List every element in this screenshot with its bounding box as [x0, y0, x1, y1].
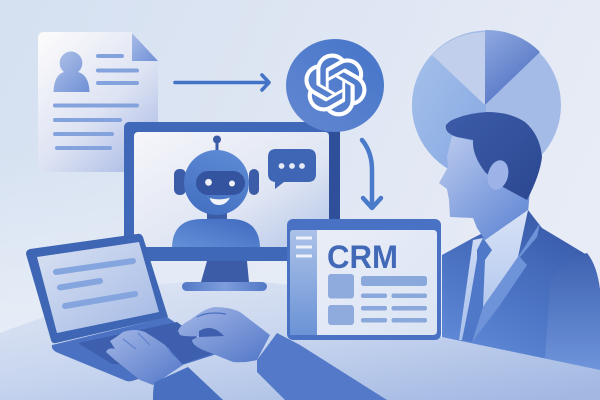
sidebar	[290, 230, 317, 335]
right lapel	[472, 223, 540, 342]
robot body	[172, 219, 260, 247]
antenna	[216, 142, 218, 152]
robot neck	[207, 213, 227, 220]
resume document	[38, 32, 158, 172]
monitor base	[182, 282, 267, 291]
page fold	[132, 33, 158, 61]
businessman	[439, 112, 600, 372]
table rows	[361, 276, 427, 322]
robot ears	[174, 169, 186, 195]
shirt collar	[459, 210, 528, 340]
laptop lid	[26, 234, 168, 343]
speech bubble	[268, 149, 316, 189]
left sleeve	[153, 367, 223, 400]
suit sleeve	[545, 253, 600, 372]
CRM tablet	[287, 219, 441, 340]
sidebar menu lines	[296, 236, 312, 258]
right sleeve	[257, 333, 387, 400]
suit	[442, 210, 600, 372]
laptop screen	[37, 242, 159, 333]
eyes	[205, 179, 212, 186]
laptop base	[52, 317, 220, 381]
left hand	[106, 330, 183, 385]
arrow: resume to AI	[175, 75, 269, 90]
curved arrow: AI to CRM	[362, 140, 381, 208]
content cards	[328, 274, 354, 325]
ear	[484, 158, 512, 192]
desk	[0, 281, 600, 400]
monitor frame	[124, 122, 340, 261]
necktie	[462, 238, 492, 342]
pie chart	[412, 30, 561, 179]
document sheet	[38, 32, 158, 172]
right hand	[178, 307, 270, 362]
CRM heading: CRM	[327, 239, 398, 275]
text lines	[55, 56, 137, 148]
robot head	[184, 150, 249, 215]
keyboard	[78, 322, 218, 364]
monitor screen	[134, 132, 329, 247]
screen lines	[56, 261, 135, 306]
tablet frame	[287, 219, 441, 340]
visor	[196, 171, 245, 195]
robot	[172, 136, 260, 247]
desktop monitor	[124, 122, 340, 291]
monitor stand	[201, 261, 249, 282]
AI logo badge	[286, 39, 384, 132]
hair	[446, 112, 542, 200]
icon: knot logo	[304, 54, 366, 116]
profile avatar	[54, 52, 90, 92]
neck and face	[439, 136, 530, 240]
laptop	[26, 234, 220, 381]
smile	[210, 198, 230, 205]
main panel	[317, 230, 437, 335]
